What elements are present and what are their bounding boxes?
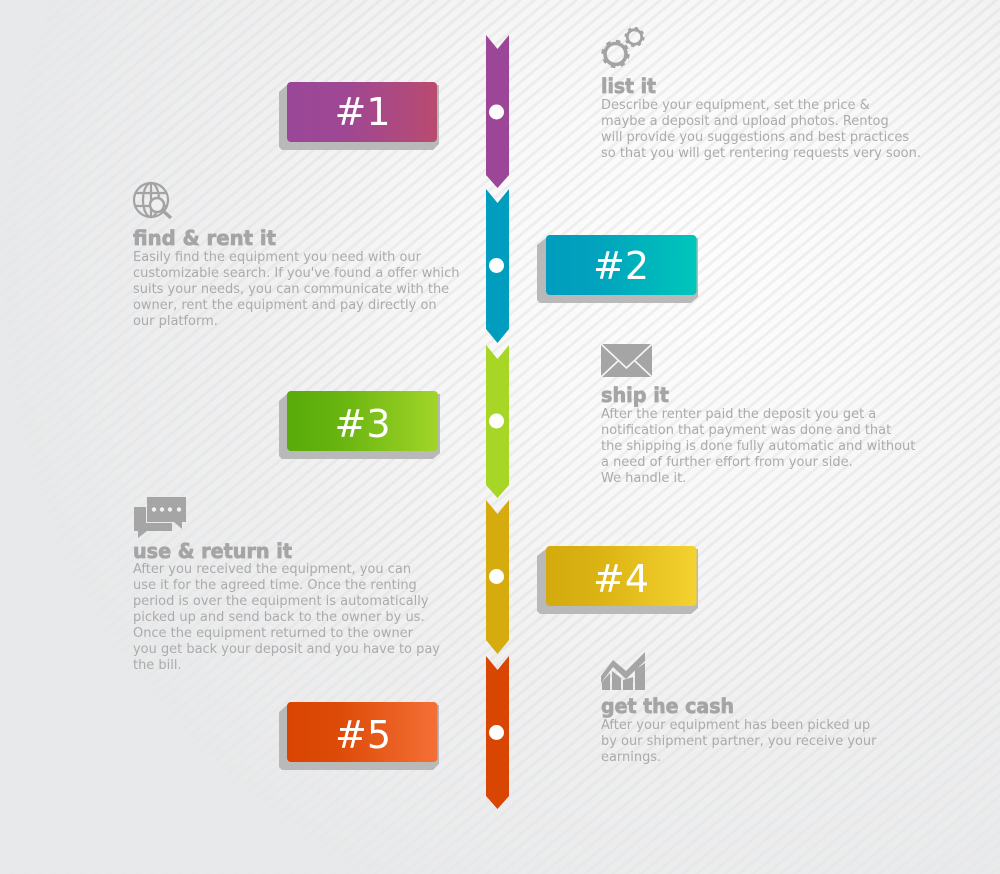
badge #5: #5	[335, 713, 391, 757]
icon: globe with magnifier	[134, 183, 171, 218]
description: After the renter paid the deposit you get a	[601, 407, 876, 422]
description: customizable search. If you've found a offer which	[133, 266, 460, 281]
description: will provide you suggestions and best practices	[601, 130, 909, 145]
description: owner, rent the equipment and pay directly on	[133, 298, 437, 313]
description: suits your needs, you can communicate with the	[133, 282, 449, 297]
description: so that you will get rentering requests very soon.	[601, 146, 921, 161]
arrow segment 2	[486, 189, 509, 343]
icon: envelope	[601, 344, 652, 377]
striped background	[246, 0, 1000, 714]
step 5: get the cash	[601, 652, 881, 765]
heading: find & rent it	[133, 226, 276, 250]
arrow segment 4	[486, 500, 509, 654]
description: our platform.	[133, 314, 218, 329]
description: Describe your equipment, set the price &	[601, 98, 870, 113]
description: the bill.	[133, 658, 182, 673]
icon: rising chart	[601, 652, 645, 690]
step 2: find & rent it	[133, 183, 464, 329]
icon: chat bubbles	[134, 497, 186, 538]
description: you get back your deposit and you have to pay	[133, 642, 440, 657]
timeline arrows	[486, 35, 509, 809]
description: We handle it.	[601, 471, 686, 486]
badge #1	[279, 82, 439, 150]
description: notification that payment was done and that	[601, 423, 891, 438]
badge #4	[537, 546, 698, 614]
description: period is over the equipment is automatically	[133, 594, 429, 609]
description: Easily find the equipment you need with our	[133, 250, 422, 265]
description: After you received the equipment, you can	[133, 562, 411, 577]
arrow segment 3	[486, 345, 509, 498]
step 3: ship it	[601, 344, 920, 486]
heading: list it	[601, 74, 656, 98]
arrow segment 1	[486, 35, 509, 188]
badge #1: #1	[334, 90, 391, 134]
timeline dots	[489, 104, 504, 740]
step 1: list it	[601, 28, 921, 161]
step 4: use & return it	[133, 497, 444, 673]
description: earnings.	[601, 750, 661, 765]
description: Once the equipment returned to the owner	[133, 626, 414, 641]
description: picked up and send back to the owner by us.	[133, 610, 425, 625]
description: the shipping is done fully automatic and without	[601, 439, 915, 454]
heading: use & return it	[133, 539, 292, 563]
arrow segment 5	[486, 656, 509, 809]
description: maybe a deposit and upload photos. Rentog	[601, 114, 889, 129]
heading: ship it	[601, 383, 669, 407]
badge #3	[279, 391, 440, 459]
icon: gears	[603, 28, 644, 67]
description: a need of further effort from your side.	[601, 455, 853, 470]
description: After your equipment has been picked up	[601, 718, 870, 733]
badge #3: #3	[334, 402, 391, 446]
badge #2	[537, 235, 698, 303]
description: by our shipment partner, you receive your	[601, 734, 877, 749]
badge #2: #2	[593, 244, 649, 288]
badge #4: #4	[593, 557, 649, 601]
heading: get the cash	[601, 694, 734, 718]
description: use it for the agreed time. Once the renting	[133, 578, 417, 593]
badge #5	[279, 702, 439, 770]
